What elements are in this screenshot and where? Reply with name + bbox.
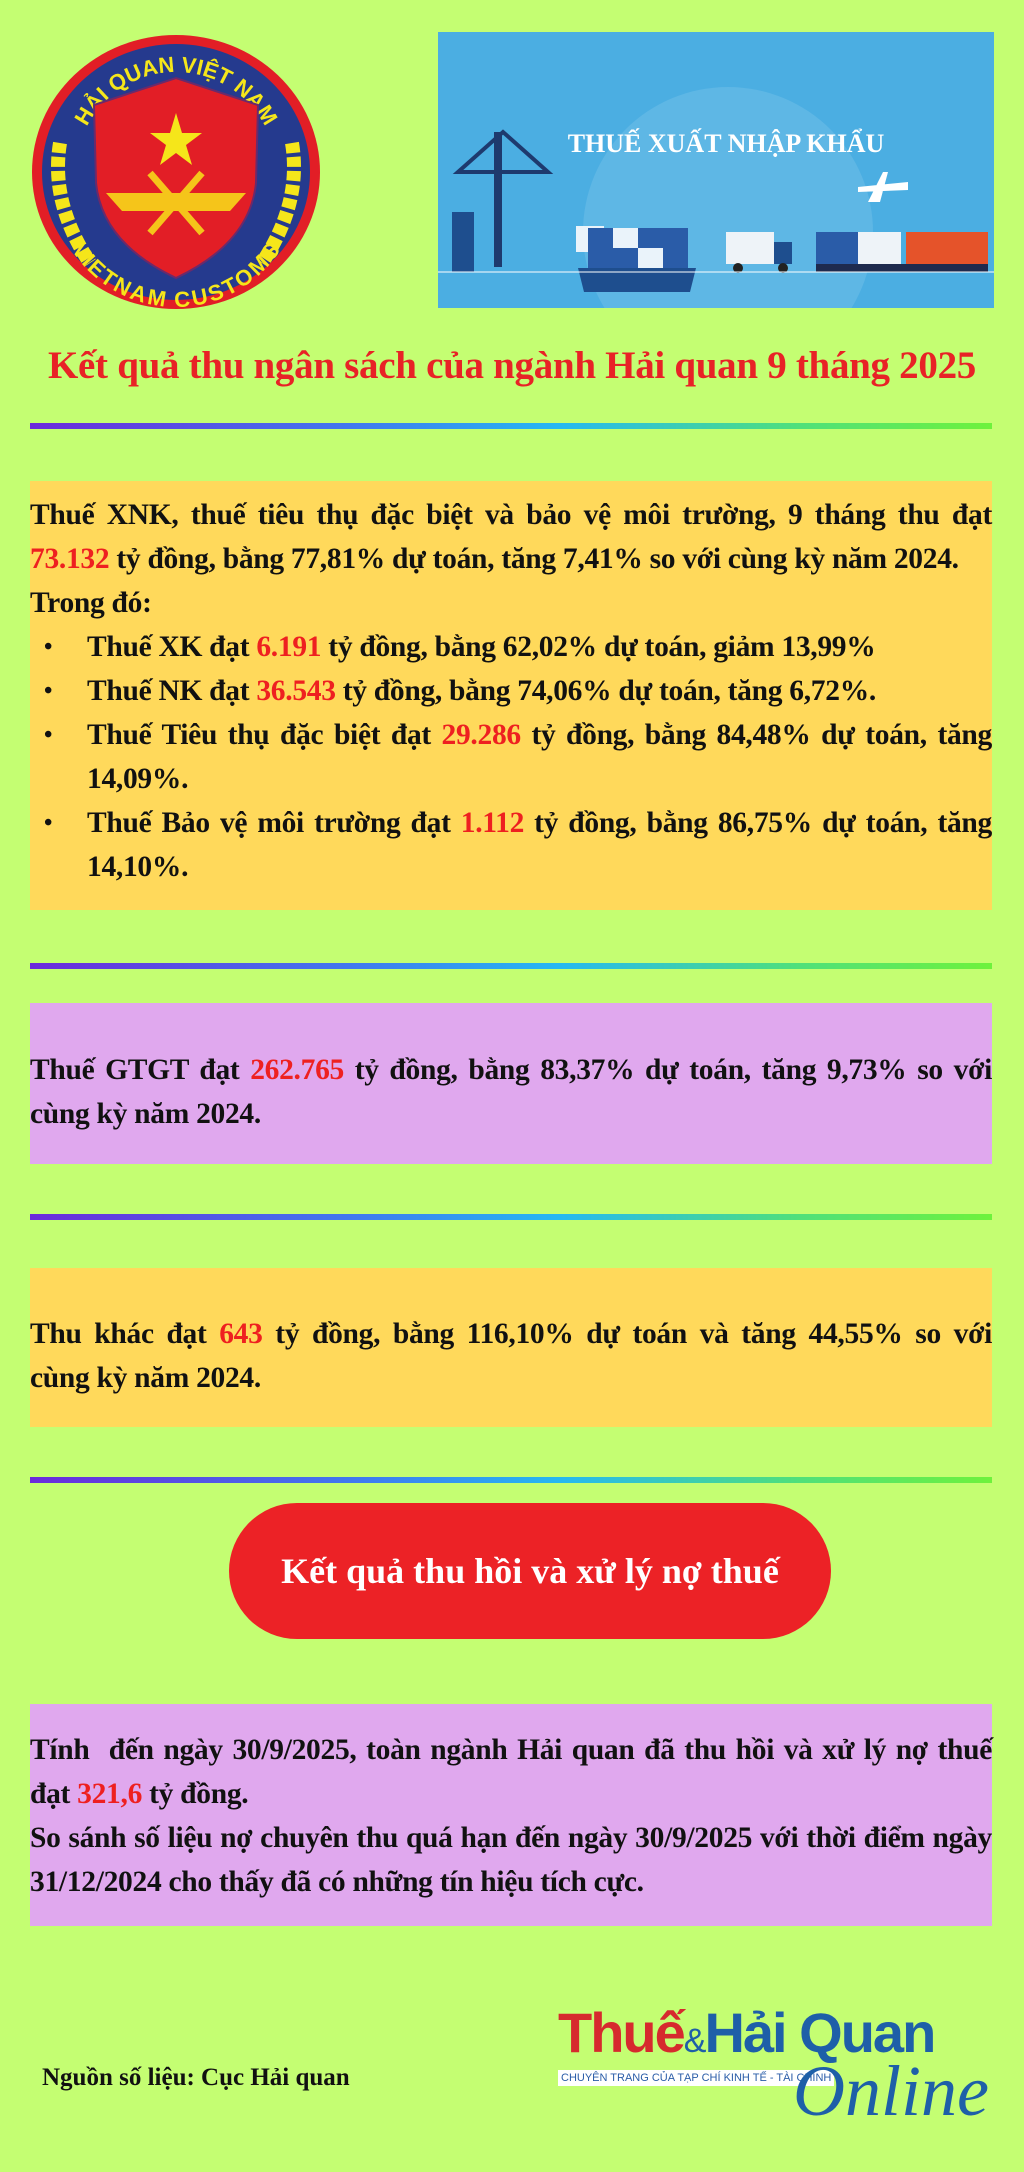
text block: XNK taxes: Thuế Tiêu thụ đặc biệt đạt 29.286 tỷ đồng, bằng 84,48% dự toán, tăng 14,09%. [87, 719, 992, 795]
panel: XNK taxes [30, 481, 992, 910]
banner: import export tax illustration: THUẾ XUẤT NHẬP KHẨU [568, 129, 885, 158]
text block: debt recovery: Tính đến ngày 30/9/2025, toàn ngành Hải quan đã thu hồi và xử lý nợ thuế đạt 321,6 tỷ đồng. [30, 1734, 992, 1810]
text block: XNK taxes: Thuế XNK, thuế tiêu thụ đặc biệt và bảo vệ môi trường, 9 tháng thu đạt 73.132 tỷ đồng, bằng 77,81% dự toán, tăng 7,41% so với cùng kỳ năm 2024. [30, 499, 992, 575]
heading pill: debt recovery: Kết quả thu hồi và xử lý nợ thuế [281, 1551, 779, 1591]
text block: XNK taxes: Trong đó: [30, 587, 152, 619]
source note: Nguồn số liệu: Cục Hải quan [42, 2064, 350, 2091]
text block: XNK taxes: Thuế Bảo vệ môi trường đạt 1.112 tỷ đồng, bằng 86,75% dự toán, tăng 14,10%. [87, 807, 992, 883]
panel: debt recovery [30, 1704, 992, 1926]
logo: Thuế & Hải Quan Online: Thuế&Hải Quan [558, 2001, 934, 2064]
panel: other revenue [30, 1268, 992, 1427]
banner: import export tax illustration [438, 32, 994, 308]
text block: debt recovery: So sánh số liệu nợ chuyên thu quá hạn đến ngày 30/9/2025 với thời điểm ngày 31/12/2024 cho thấy đã có những tín hiệu tích cực. [30, 1822, 992, 1898]
logo: Vietnam Customs emblem [32, 35, 320, 309]
logo: Thuế & Hải Quan Online [558, 2001, 989, 2131]
logo: Thuế & Hải Quan Online: Online [793, 2051, 989, 2131]
logo: Vietnam Customs emblem: HẢI QUAN VIỆT NAM [74, 56, 278, 126]
heading pill: debt recovery [229, 1503, 831, 1639]
logo: Thuế & Hải Quan Online: CHUYÊN TRANG CỦA TẠP CHÍ KINH TẾ - TÀI CHÍNH [561, 2072, 831, 2084]
logo: Vietnam Customs emblem: VIETNAM CUSTOMS [74, 244, 279, 307]
panel: GTGT [30, 1003, 992, 1164]
text block: XNK taxes [30, 499, 992, 883]
text block: other revenue: Thu khác đạt 643 tỷ đồng, bằng 116,10% dự toán và tăng 44,55% so với cùng kỳ năm 2024. [30, 1318, 992, 1394]
text block: debt recovery [30, 1734, 994, 1898]
text block: GTGT: Thuế GTGT đạt 262.765 tỷ đồng, bằng 83,37% dự toán, tăng 9,73% so với cùng kỳ năm 2024. [30, 1054, 992, 1130]
text block: XNK taxes: Thuế NK đạt 36.543 tỷ đồng, bằng 74,06% dự toán, tăng 6,72%. [87, 675, 876, 707]
text block: XNK taxes: Thuế XK đạt 6.191 tỷ đồng, bằng 62,02% dự toán, giảm 13,99% [87, 631, 875, 663]
title: Kết quả thu ngân sách của ngành Hải quan 9 tháng 2025 [48, 344, 976, 387]
